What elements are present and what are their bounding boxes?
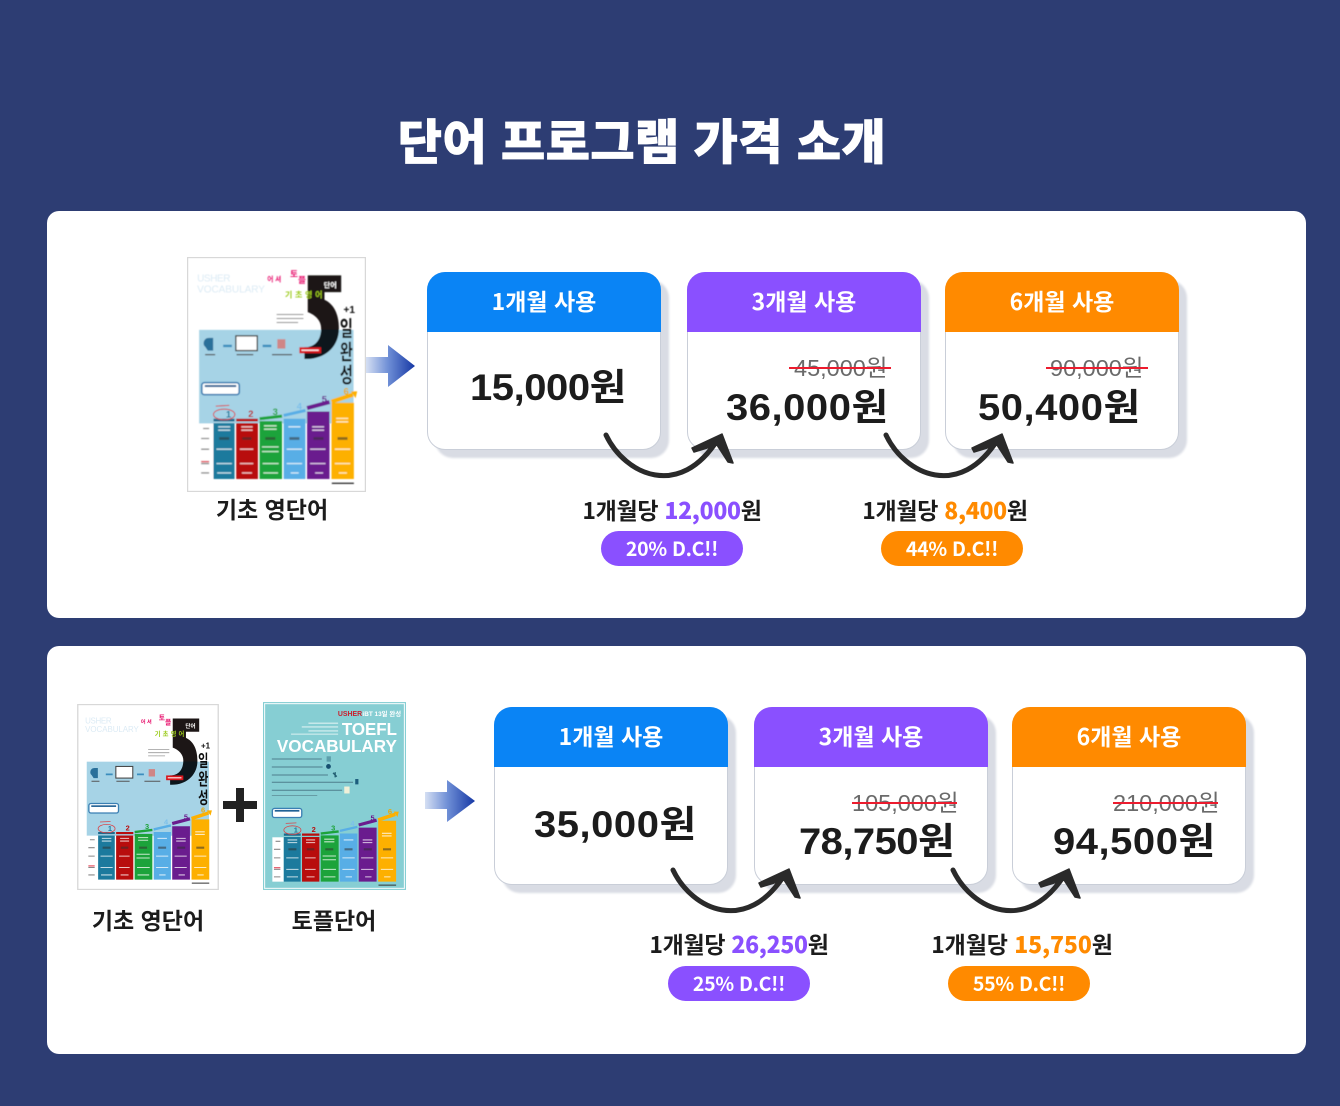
card: 1 month xyxy=(427,272,661,450)
book cover: basic vocabulary: 6 xyxy=(201,806,205,815)
price: 50,400원 xyxy=(978,387,1141,428)
card header xyxy=(1012,707,1246,767)
book cover: basic vocabulary: 6 xyxy=(344,386,349,396)
card: 3 months xyxy=(754,707,988,885)
arrow: books to prices xyxy=(425,780,475,822)
card header: 3개월 사용 xyxy=(819,718,923,752)
card header: 1개월 사용 xyxy=(559,718,663,752)
curved arrow: 3 to 6 months xyxy=(950,868,1081,914)
book cover: basic vocabulary: 완 xyxy=(340,340,353,364)
book cover: basic vocabulary: 5 xyxy=(322,395,327,405)
discount badge: 44% xyxy=(881,531,1023,566)
card header: 6개월 사용 xyxy=(1010,283,1114,317)
book cover: TOEFL vocabulary: 2 xyxy=(312,825,316,834)
book cover: basic vocabulary: 일 xyxy=(340,317,353,341)
discount badge: 20% xyxy=(601,531,743,566)
book cover: basic vocabulary: 일 xyxy=(198,752,208,771)
book cover: basic vocabulary: 토 xyxy=(290,269,298,279)
book cover: TOEFL vocabulary: VOCABULARY xyxy=(277,736,397,756)
old price: 105,000원 xyxy=(852,790,959,816)
card header: 6개월 사용 xyxy=(1077,718,1181,752)
book cover: basic vocabulary: +1 xyxy=(344,305,355,316)
monthly price: 3 months: 1개월당 26,250원 xyxy=(649,926,829,960)
book cover: TOEFL vocabulary xyxy=(263,702,406,890)
discount badge: 20%: 20% D.C!! xyxy=(626,533,718,562)
old price: 90,000원 xyxy=(1050,355,1144,381)
book cover: basic vocabulary: 기초영어 xyxy=(285,289,322,299)
card: 1 month xyxy=(494,707,728,885)
book cover: basic vocabulary: +1 xyxy=(201,741,211,750)
panel: basic vocabulary pricing xyxy=(47,211,1306,618)
monthly price: 6 months: 1개월당 15,750원 xyxy=(931,926,1113,960)
arrow: book to prices xyxy=(366,345,415,387)
discount badge: 25%: 25% D.C!! xyxy=(693,968,785,997)
panel: basic plus TOEFL vocabulary pricing xyxy=(47,646,1306,1054)
book cover: TOEFL vocabulary: 5 xyxy=(370,814,375,823)
book cover: basic vocabulary: 2 xyxy=(126,824,130,833)
strikethrough xyxy=(789,367,891,369)
curved arrow: 3 to 6 months xyxy=(884,432,1014,478)
monthly price: 3 months: 1개월당 12,000원 xyxy=(582,492,762,526)
card header xyxy=(754,707,988,767)
monthly price: 6 months: 1개월당 8,400원 xyxy=(862,492,1028,526)
book cover: basic vocabulary: 3 xyxy=(273,407,278,417)
book cover: basic vocabulary: 기초영어 xyxy=(155,729,185,738)
book cover: basic vocabulary: VOCABULARY xyxy=(85,725,140,734)
old price: 45,000원 xyxy=(794,355,888,381)
card header xyxy=(945,272,1179,332)
book cover: basic vocabulary: 4 xyxy=(164,818,169,827)
book cover: basic vocabulary: 성 xyxy=(340,364,353,387)
caption: basic vocabulary: 기초 영단어 xyxy=(92,902,204,936)
book cover: basic vocabulary: 어셔 xyxy=(141,717,153,725)
caption: TOEFL vocabulary: 토플단어 xyxy=(292,902,376,936)
book cover: basic vocabulary: VOCABULARY xyxy=(197,284,265,295)
book cover: basic vocabulary: 4 xyxy=(297,401,303,411)
curved arrow: 1 to 3 months xyxy=(604,432,734,478)
book cover: basic vocabulary: 플 xyxy=(298,275,306,285)
card header xyxy=(494,707,728,767)
price: 35,000원 xyxy=(534,804,697,845)
strikethrough xyxy=(852,802,957,804)
book cover: basic vocabulary: 1 xyxy=(226,409,231,419)
card header: 3개월 사용 xyxy=(752,283,856,317)
book cover: basic vocabulary: 2 xyxy=(248,409,253,419)
caption: basic vocabulary: 기초 영단어 xyxy=(216,491,328,525)
book cover: TOEFL vocabulary: TOEFL xyxy=(342,719,397,739)
discount badge: 44%: 44% D.C!! xyxy=(906,533,998,562)
book cover: basic vocabulary xyxy=(187,257,366,492)
title: 단어 프로그램 가격 소개 xyxy=(398,103,886,173)
book cover: basic vocabulary: USHER xyxy=(197,273,231,284)
price: 15,000원 xyxy=(470,367,626,408)
book cover: TOEFL vocabulary: USHER xyxy=(338,711,362,718)
book cover: basic vocabulary: 어셔 xyxy=(267,274,283,283)
strikethrough xyxy=(1046,367,1148,369)
book cover: basic vocabulary: 플 xyxy=(165,719,172,727)
book cover: basic vocabulary: 단어 xyxy=(324,280,337,289)
card: 6 months xyxy=(945,272,1179,450)
curved arrow: 1 to 3 months xyxy=(670,868,801,914)
book cover: basic vocabulary: 5 xyxy=(184,812,188,821)
plus sign xyxy=(223,788,257,822)
book cover: basic vocabulary: 성 xyxy=(198,789,208,808)
book cover: basic vocabulary: 1 xyxy=(108,824,112,833)
card header: 1개월 사용 xyxy=(492,283,596,317)
discount badge: 25% xyxy=(668,966,810,1001)
strikethrough xyxy=(1113,802,1218,804)
price: 36,000원 xyxy=(726,387,889,428)
book cover: basic vocabulary xyxy=(77,704,219,890)
card: 6 months xyxy=(1012,707,1246,885)
book cover: basic vocabulary: 3 xyxy=(145,822,149,831)
book cover: basic vocabulary: 토 xyxy=(159,714,166,722)
book cover: basic vocabulary: USHER xyxy=(85,716,112,725)
book cover: basic vocabulary: 완 xyxy=(198,771,208,790)
discount badge: 55%: 55% D.C!! xyxy=(973,968,1065,997)
book cover: TOEFL vocabulary: 4 xyxy=(350,819,355,828)
old price: 210,000원 xyxy=(1113,790,1220,816)
card header xyxy=(427,272,661,332)
card: 3 months xyxy=(687,272,921,450)
discount badge: 55% xyxy=(948,966,1090,1001)
book cover: TOEFL vocabulary: 6 xyxy=(388,807,392,816)
book cover: basic vocabulary: 단어 xyxy=(185,722,196,730)
book cover: TOEFL vocabulary: 3 xyxy=(331,823,335,832)
book cover: TOEFL vocabulary: 1 xyxy=(294,825,298,834)
price: 94,500원 xyxy=(1053,821,1216,862)
price: 78,750원 xyxy=(799,821,954,862)
book cover: TOEFL vocabulary: iBT 13일 완성 xyxy=(362,709,401,718)
card header xyxy=(687,272,921,332)
